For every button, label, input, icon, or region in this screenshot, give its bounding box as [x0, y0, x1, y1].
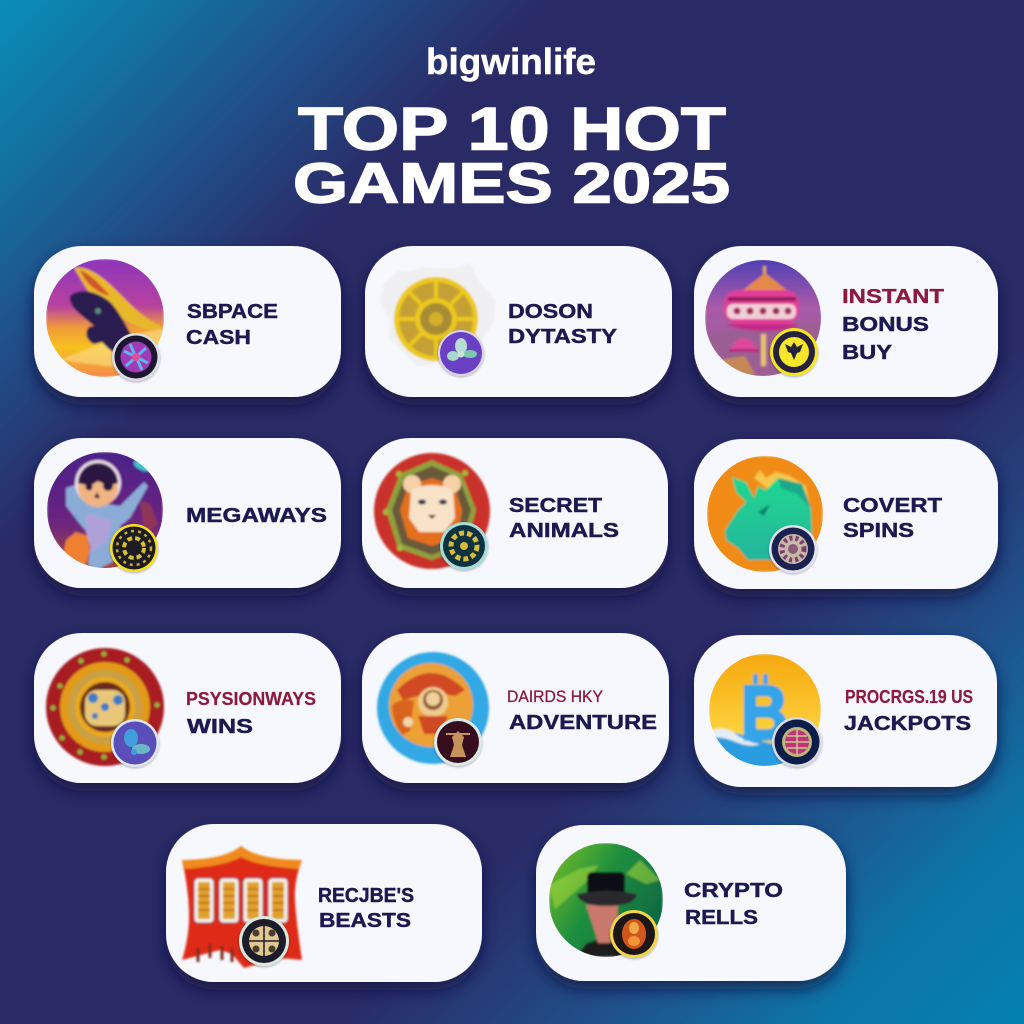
label — [844, 687, 973, 735]
title: GAMES 2025 — [293, 152, 730, 216]
icon: lion — [374, 453, 490, 569]
icon: blue disc — [377, 652, 489, 764]
card background — [694, 635, 997, 787]
title: TOP 10 HOT — [298, 96, 726, 162]
badge — [112, 333, 160, 381]
panel: doson dytasty — [365, 246, 672, 397]
label — [843, 495, 942, 542]
icon: bitcoin — [709, 654, 821, 767]
card background — [34, 633, 341, 783]
icon: bitcoin: B — [741, 671, 788, 756]
badge — [772, 717, 822, 767]
label — [186, 689, 316, 738]
icon: man in black hat — [549, 843, 663, 957]
label: CRYPTO — [684, 880, 783, 902]
panel: megaways — [34, 438, 341, 588]
label — [508, 301, 618, 348]
badge — [111, 719, 159, 767]
card background — [362, 633, 669, 783]
label — [842, 286, 944, 364]
card background — [34, 246, 341, 397]
panel: recjbes beasts — [166, 824, 482, 982]
label: DOSON — [508, 301, 593, 323]
card background — [34, 438, 341, 588]
icon: slot shield — [182, 846, 302, 968]
panel: progressive jackpots — [694, 635, 997, 787]
title — [293, 96, 730, 216]
label — [507, 688, 657, 734]
icon: green beast — [707, 456, 823, 572]
card background — [365, 246, 672, 397]
label — [318, 885, 414, 932]
label: INSTANT — [842, 286, 944, 308]
card background — [694, 439, 998, 589]
badge — [110, 524, 158, 572]
icon: astronaut — [47, 452, 163, 570]
label: COVERT — [843, 495, 942, 517]
badge — [440, 522, 488, 570]
badge — [239, 916, 289, 966]
icon: gold coin — [380, 263, 496, 367]
badge — [769, 525, 817, 573]
panel: covert spins — [694, 439, 998, 589]
panel: crypto rells — [536, 825, 846, 981]
label: DAIRDS HKY — [507, 688, 603, 706]
label: SPINS — [843, 520, 914, 542]
label: BUY — [842, 342, 893, 364]
card background — [694, 246, 998, 397]
label: SBPACE — [187, 301, 278, 323]
card background — [362, 438, 668, 588]
icon: ornate wheel — [46, 648, 164, 766]
panel: space cash — [34, 246, 341, 397]
panel: psysion ways wins — [34, 633, 341, 783]
badge — [770, 328, 818, 376]
badge — [610, 910, 658, 958]
label — [684, 880, 783, 929]
label: MEGAWAYS — [186, 505, 327, 527]
label: RELLS — [685, 907, 758, 929]
badge — [438, 330, 484, 376]
panel: secret animals — [362, 438, 668, 588]
label: CASH — [186, 327, 251, 349]
icon: carousel — [705, 259, 822, 378]
label — [509, 495, 619, 542]
label: BONUS — [842, 314, 929, 336]
label: RECJBE'S — [318, 885, 414, 907]
brand logo: bigwinlife — [426, 41, 596, 82]
label: BEASTS — [319, 910, 411, 932]
icon: rocket — [46, 259, 164, 377]
label — [186, 301, 278, 349]
card background — [166, 824, 482, 982]
label: SECRET — [509, 495, 602, 517]
label: PSYSIONWAYS — [186, 689, 316, 709]
panel: daring hiky adventure — [362, 633, 669, 783]
badge — [434, 718, 482, 766]
label: WINS — [187, 716, 253, 738]
label: ANIMALS — [509, 520, 619, 542]
label: DYTASTY — [508, 326, 618, 348]
label: JACKPOTS — [844, 713, 971, 735]
label: ADVENTURE — [509, 712, 657, 734]
card background — [536, 825, 846, 981]
label: PROCRGS.19 US — [845, 687, 973, 707]
panel: instant bonus buy — [694, 246, 998, 397]
